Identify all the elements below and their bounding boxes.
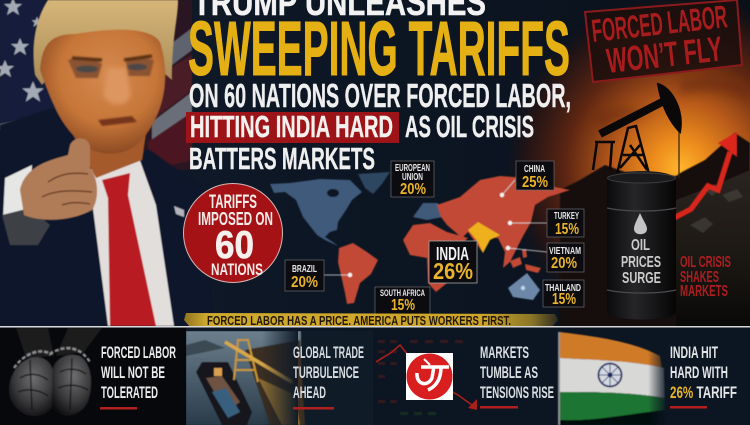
badge: tariffs imposed on 60 nations: TARIFFS bbox=[209, 192, 257, 213]
headline line 5: BATTERS MARKETS bbox=[189, 141, 375, 176]
map markers bbox=[348, 193, 525, 290]
panel caption bbox=[670, 343, 737, 402]
label: India: 26% bbox=[433, 258, 473, 284]
panel caption: TURBULENCE bbox=[293, 363, 359, 382]
label: China bbox=[516, 161, 554, 191]
figure: Trump pointing bbox=[0, 0, 185, 326]
Australia bbox=[508, 273, 540, 300]
label: South Africa bbox=[375, 287, 430, 315]
panel caption bbox=[101, 343, 176, 402]
panel: markets bbox=[375, 328, 558, 425]
face bbox=[40, 30, 165, 154]
Eurasia bbox=[437, 176, 570, 268]
panel caption: TOLERATED bbox=[101, 383, 158, 402]
eye sockets and eyes bbox=[68, 56, 154, 78]
background: American flag bbox=[0, 0, 192, 170]
hair mass bbox=[33, 0, 178, 85]
stamp: forced labor won't fly bbox=[585, 0, 742, 82]
India highlighted bbox=[468, 222, 500, 253]
barrel top rim bbox=[608, 173, 676, 183]
icon: oil pump silhouette bbox=[593, 84, 681, 178]
label: Turkey bbox=[547, 209, 584, 238]
label: China: 25% bbox=[522, 174, 548, 191]
red accent bar bbox=[670, 406, 707, 408]
badge: tariffs imposed on 60 nations: 60 bbox=[215, 224, 254, 267]
label: India bbox=[429, 241, 477, 284]
Southeast Asia islands bbox=[510, 249, 541, 273]
image: chained hands bbox=[9, 328, 102, 416]
shirt cuff bbox=[3, 165, 32, 218]
shirt collar and front bbox=[88, 155, 174, 326]
North America bbox=[270, 179, 362, 246]
panel caption: INDIA HIT bbox=[670, 343, 718, 362]
gold banner slogan: FORCED LABOR HAS A PRICE. AMERICA PUTS WORKERS FIRST. bbox=[207, 313, 511, 328]
icon: oil barrel: PRICES bbox=[621, 254, 661, 271]
panel: global trade bbox=[186, 331, 373, 425]
label: Thailand: 15% bbox=[552, 291, 576, 308]
logo bbox=[406, 353, 453, 400]
South America bbox=[338, 243, 378, 304]
suit jacket bbox=[0, 107, 185, 326]
badge: tariffs imposed on 60 nations: NATIONS bbox=[211, 260, 263, 279]
wristwatch bbox=[2, 208, 50, 245]
Europe bbox=[413, 203, 443, 220]
label: Vietnam bbox=[547, 243, 584, 272]
panel caption: TENSIONS RISE bbox=[480, 383, 554, 402]
label: Vietnam: 20% bbox=[551, 255, 577, 272]
label: European Union: UNION bbox=[402, 172, 423, 183]
red tie bbox=[102, 173, 156, 326]
label: European Union bbox=[391, 161, 434, 198]
panel caption: TUMBLE AS bbox=[480, 363, 538, 382]
headline bbox=[186, 0, 571, 176]
label: Brazil bbox=[285, 260, 324, 291]
bottom divider bbox=[0, 326, 750, 328]
label: Brazil: 20% bbox=[291, 274, 318, 291]
panel: India bbox=[558, 328, 750, 425]
barrel ribs bbox=[607, 208, 676, 293]
headline line 4 remainder: AS OIL CRISIS bbox=[405, 109, 534, 144]
red accent bar bbox=[100, 407, 137, 410]
panel caption bbox=[293, 343, 364, 402]
caption: oil crisis shakes markets: SHAKES bbox=[680, 269, 719, 286]
label: Vietnam: VIETNAM bbox=[549, 246, 581, 257]
Greenland bbox=[358, 172, 390, 194]
label: Thailand bbox=[543, 280, 584, 308]
flag lapel pin bbox=[174, 206, 184, 217]
label: European Union: EUROPEAN bbox=[395, 163, 430, 174]
panel caption: FORCED LABOR bbox=[101, 343, 176, 362]
label: Brazil: BRAZIL bbox=[292, 264, 317, 275]
mouth bbox=[98, 116, 137, 126]
image: container port bbox=[186, 331, 305, 425]
badge: tariffs imposed on 60 nations bbox=[184, 184, 282, 282]
red accent bar bbox=[480, 406, 518, 408]
Africa bbox=[403, 223, 468, 292]
image: falling stock chart bbox=[376, 345, 472, 405]
label: European Union: 20% bbox=[400, 181, 426, 198]
icon: rising red arrow bbox=[674, 132, 737, 218]
panel caption: GLOBAL TRADE bbox=[293, 343, 364, 362]
background: fiery sky with ground bbox=[500, 0, 750, 327]
pointing fist bbox=[20, 138, 97, 220]
label: South Africa: SOUTH AFRICA bbox=[380, 288, 425, 298]
red accent bar bbox=[293, 407, 334, 410]
neck bbox=[73, 135, 146, 178]
flag fade bbox=[648, 328, 668, 425]
label: China: CHINA bbox=[524, 164, 545, 175]
label: India: INDIA bbox=[436, 244, 469, 264]
oil drop icon bbox=[634, 213, 647, 234]
arrow head bbox=[468, 399, 477, 410]
panel caption: MARKETS bbox=[480, 343, 529, 362]
icon: oil barrel: SURGE bbox=[622, 270, 661, 287]
panel caption: AHEAD bbox=[293, 383, 326, 402]
caption: oil crisis shakes markets bbox=[680, 254, 731, 300]
barrel text: OIL bbox=[631, 237, 650, 254]
panel caption: WILL NOT BE bbox=[101, 363, 165, 382]
label: Turkey: 15% bbox=[555, 221, 579, 238]
image: Indian flag bbox=[558, 332, 665, 425]
headline line 4 highlighted: HITTING INDIA HARD bbox=[190, 109, 393, 144]
red highlight box bbox=[186, 112, 399, 143]
Hudson Bay bbox=[327, 189, 339, 197]
badge: tariffs imposed on 60 nations: IMPOSED ON bbox=[198, 209, 273, 229]
label: Thailand: THAILAND bbox=[545, 283, 581, 294]
panel: forced labor bbox=[0, 328, 186, 425]
connector lines bbox=[324, 180, 547, 275]
label: Turkey: TURKEY bbox=[554, 211, 579, 222]
icon: oil barrel bbox=[607, 171, 676, 320]
label: South Africa: 15% bbox=[391, 297, 415, 314]
panel caption bbox=[480, 343, 554, 402]
fade into panel background bbox=[262, 331, 298, 425]
world map bbox=[270, 172, 570, 304]
nose bbox=[103, 68, 131, 104]
stock ticker glow bbox=[378, 340, 463, 415]
